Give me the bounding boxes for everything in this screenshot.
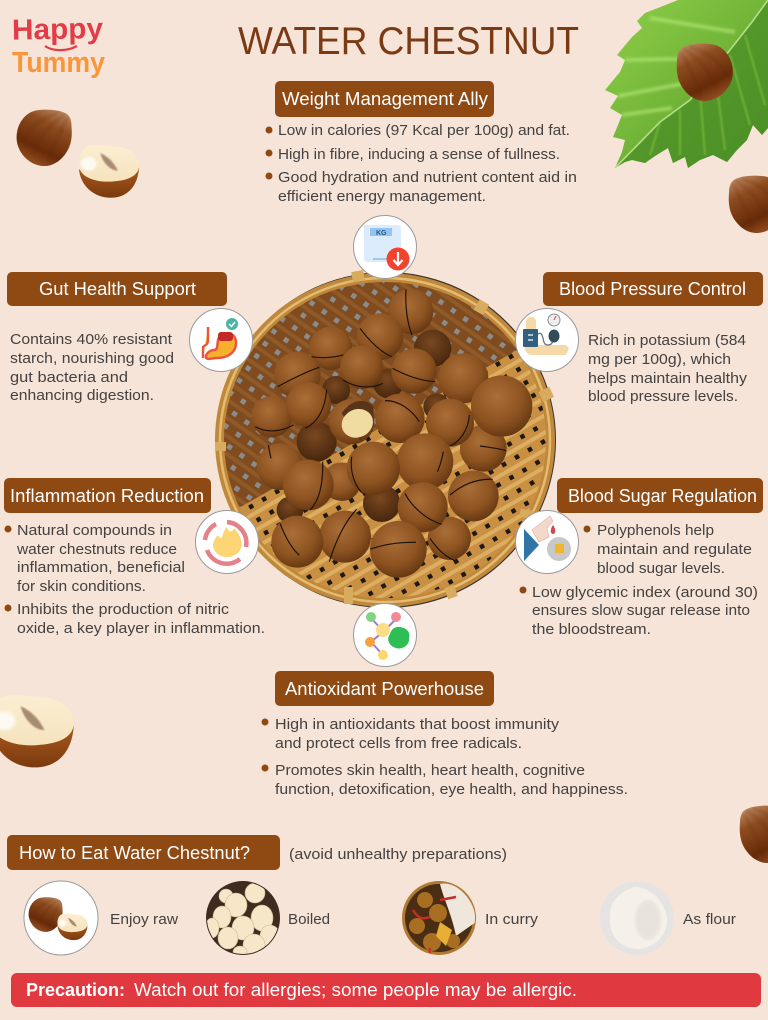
heading: Blood Pressure Control [543,272,763,306]
logo: Happy Tummy: Tummy [12,47,105,79]
serving: as flour: As flour [683,911,736,928]
icon: blood sugar [516,510,578,574]
heading: Weight Management Ally: Weight Management Ally [282,89,488,109]
logo: Happy Tummy: Happy [12,13,103,47]
text block: blood pressure: helps maintain healthy [588,370,748,387]
heading: Antioxidant Powerhouse [275,671,494,706]
nuts [251,289,532,578]
decoration: half chestnut left edge [0,695,74,767]
heading: How to Eat Water Chestnut [7,835,280,870]
icon: inflammation flame [196,510,258,574]
text block: antioxidants: Promotes skin health, heart health, cognitive [275,762,585,779]
text block: inflammation: inflammation, beneficial [17,559,185,576]
basket weave [224,282,546,598]
title: WATER CHESTNUT [238,20,579,63]
precaution bar [11,973,761,1007]
text block: blood sugar: Polyphenols help [597,522,714,539]
icon: weight scale: KG [376,230,387,237]
icon: antioxidant molecules [354,604,416,666]
heading: Inflammation Reduction [4,478,211,513]
text block: blood pressure [588,332,748,405]
heading: Blood Pressure Control: Blood Pressure Control [559,279,746,299]
text block: gut health: gut bacteria and [10,369,128,386]
note: avoid unhealthy preparations: (avoid unhealthy preparations) [289,846,507,863]
text block: blood sugar: maintain and regulate [597,541,752,558]
text block: blood pressure: blood pressure levels. [588,388,738,405]
icon: blood pressure cuff [516,308,578,372]
serving: enjoy raw: Enjoy raw [110,911,178,928]
serving: boiled: Boiled [288,911,330,928]
icon: stomach [190,308,252,372]
icon: weight scale [354,216,416,278]
text block: weight management: High in fibre, inducing a sense of fullness. [278,146,560,163]
text block: gut health: enhancing digestion. [10,387,154,404]
heading: Antioxidant Powerhouse: Antioxidant Powerhouse [285,679,484,699]
heading: Gut Health Support: Gut Health Support [39,279,196,299]
text block: blood sugar: ensures slow sugar release into [532,602,750,619]
text block: antioxidants: and protect cells from free radicals. [275,735,522,752]
heading: How to Eat Water Chestnut: How to Eat Water Chestnut? [19,843,250,863]
text block: blood sugar: blood sugar levels. [597,560,725,577]
text block: weight management: Good hydration and nutrient content aid in [278,169,577,186]
heading: Blood Sugar Regulation: Blood Sugar Regulation [568,486,757,506]
text block: inflammation: Inhibits the production of nitric [17,601,230,618]
basket rim [215,273,555,607]
heading: Blood Sugar Regulation [557,478,763,513]
rim ties [215,270,554,604]
text block: blood sugar: the bloodstream. [532,621,651,638]
text block: antioxidants [262,716,628,798]
decoration: leaf with chestnut [605,0,768,168]
precaution bar: Watch out for allergies; some people may be allergic. [134,980,577,1000]
text block: blood sugar: Low glycemic index (around 30) [532,584,758,601]
precaution bar: Precaution: [26,980,125,1000]
text block: inflammation: oxide, a key player in inflammation. [17,620,265,637]
text block: weight management [266,122,577,205]
decoration: chestnut right edge [729,176,768,233]
text block: blood pressure: mg per 100g), which [588,351,731,368]
text block: gut health: starch, nourishing good [10,350,174,367]
text block: inflammation: for skin conditions. [17,578,146,595]
text block: gut health [10,331,174,404]
heading: Weight Management Ally [275,81,494,117]
text block: blood sugar [520,522,758,638]
heading: Gut Health Support [7,272,227,306]
heading: Inflammation Reduction: Inflammation Reduction [10,486,204,506]
text block: blood pressure: Rich in potassium (584 [588,332,746,349]
serving: in curry: In curry [485,911,539,928]
text block: inflammation [4,522,265,637]
text block: gut health: Contains 40% resistant [10,331,173,348]
text block: weight management: Low in calories (97 Kcal per 100g) and fat. [278,122,570,139]
text block: inflammation: water chestnuts reduce [16,541,177,558]
serving: enjoy raw [24,881,178,955]
text block: inflammation: Natural compounds in [17,522,172,539]
text block: weight management: efficient energy management. [278,188,486,205]
decoration: chestnuts top left [17,110,139,198]
decoration: chestnut lower right edge [740,806,768,863]
text block: antioxidants: function, detoxification, eye health, and happiness. [275,781,628,798]
basket of nuts [215,270,556,608]
text block: antioxidants: High in antioxidants that boost immunity [275,716,560,733]
logo: Happy Tummy [12,13,105,79]
basket shadow [216,272,556,608]
serving: boiled [205,881,330,958]
serving: in curry [402,881,539,959]
serving: as flour [600,881,736,955]
